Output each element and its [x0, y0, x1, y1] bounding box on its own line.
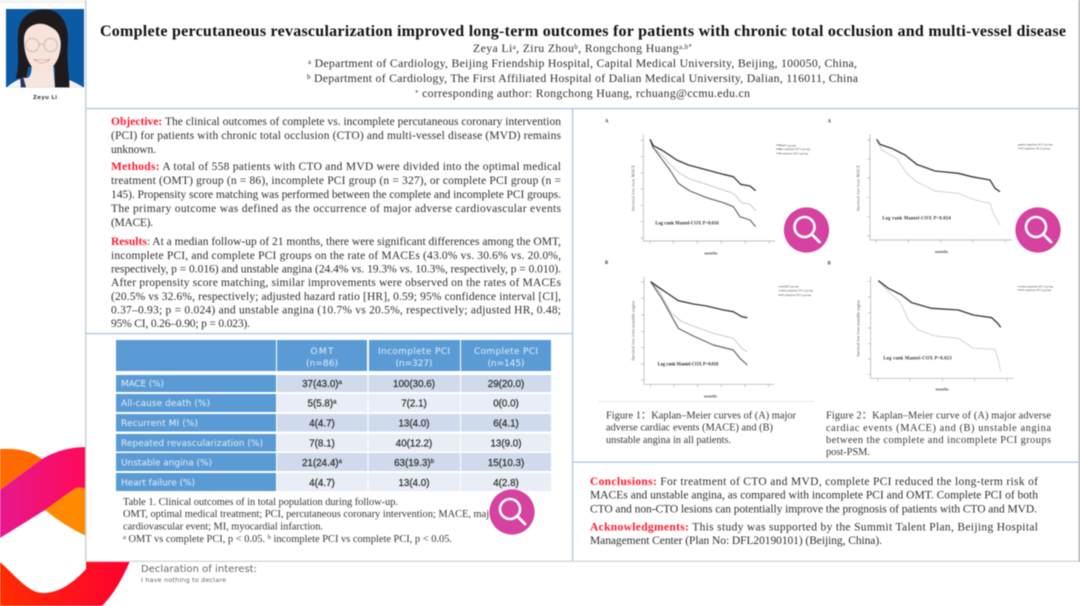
authors and affiliations: * — [415, 89, 419, 97]
acknowledgments text: Management Center (Plan No: DFL20190101) (Beijing, China). — [590, 535, 882, 547]
chart B: KM curves all patients unstable angina — [605, 261, 814, 398]
conclusions text: CTO and non-CTO lesions can potentially improve the prognosis of patients with CTO and MVD. — [590, 504, 1037, 516]
chart A: KM curves post-PSM MACE: months — [935, 249, 949, 254]
row: heart failure: 4(4.7) — [309, 478, 335, 489]
methods text — [111, 161, 562, 229]
row: all-cause death: 7(2.1) — [401, 398, 427, 410]
figure 1 caption: adverse cardiac events (MACE) and (B) — [606, 422, 773, 434]
figure 2 caption: post-PSM. — [826, 447, 870, 458]
author photo — [6, 9, 84, 87]
table caption: cardiovascular event; MI, myocardial infarction. — [123, 522, 323, 532]
authors and affiliations: a,b* — [679, 43, 692, 51]
chart A: KM curves all patients MACE: months — [704, 251, 718, 256]
chart B: KM curves post-PSM unstable angina: months — [936, 387, 949, 392]
title: Complete percutaneous revascularization improved long-term outcomes for patients with chronic total occlusion and multi-vessel disease — [100, 23, 1066, 40]
results text: incomplete PCI, and complete PCI groups on the rate of MACEs (43.0% vs. 30.6% vs. 20.0%, — [111, 250, 561, 262]
authors and affiliations: Department of Cardiology, Beijing Friendship Hospital, Capital Medical University, Beijing, 100050, China, — [311, 56, 857, 70]
table caption: b — [268, 534, 271, 541]
chart A: KM curves all patients MACE — [605, 119, 811, 256]
row: recurrent MI: Recurrent MI (%) — [121, 419, 198, 429]
clinical outcomes table: (n=327) — [396, 359, 432, 369]
row: unstable angina: 63(19.3) — [394, 458, 431, 469]
row: unstable angina — [116, 453, 551, 471]
chart A: KM curves all patients MACE: Complete PCI group — [779, 151, 808, 155]
row: heart failure — [116, 473, 551, 491]
figure 2 caption: cardiac events (MACE) and (B) unstable angina — [826, 423, 1051, 434]
clinical outcomes table: (n=145) — [488, 359, 524, 369]
clinical outcomes table — [116, 340, 551, 491]
conclusions text: MACEs and unstable angina, as compared with incomplete PCI and OMT. Complete PCI of both — [590, 490, 1038, 502]
objective text: Objective: The clinical outcomes of complete vs. incomplete percutaneous coronary intervention — [111, 116, 561, 128]
authors and affiliations: b — [307, 73, 311, 81]
row: recurrent MI: 13(4.0) — [398, 418, 430, 430]
row: repeated revascularization — [116, 434, 551, 452]
row: recurrent MI: 4(4.7) — [309, 418, 335, 430]
table caption: a — [123, 534, 126, 541]
chart A: KM curves post-PSM MACE — [828, 119, 1053, 254]
row: unstable angina: 15(10.3) — [488, 458, 524, 469]
results text: 0.37–0.93; p = 0.024) and unstable angina (10.7% vs 20.5%, respectively; adjusted HR, 0.48; — [111, 304, 561, 316]
clinical outcomes table: OMT — [310, 347, 334, 357]
chart B: KM curves all patients unstable angina: Incomplete PCI group — [782, 289, 814, 293]
row: all-cause death — [116, 394, 551, 412]
objective text: (PCI) for patients with chronic total occlusion (CTO) and multi-vessel disease (MVD) remains — [111, 130, 562, 142]
row: unstable angina: a — [339, 459, 343, 465]
results text: After propensity score matching, similar improvements were observed on the rates of MACEs — [111, 277, 562, 289]
logo ribbon — [0, 447, 130, 606]
row: repeated revascularization: 13(9.0) — [490, 438, 522, 450]
chart B: KM curves all patients unstable angina: Survival free from unstable angina — [631, 301, 636, 361]
row: unstable angina: 21(24.4) — [302, 458, 339, 469]
row: all-cause death: 5(5.8) — [308, 398, 333, 410]
results text: 95% CI, 0.26–0.90; p = 0.023). — [111, 318, 250, 330]
clinical outcomes table: (n=86) — [306, 359, 338, 369]
authors and affiliations: a — [308, 58, 312, 66]
figure 1 caption — [598, 401, 814, 446]
results text — [111, 236, 562, 330]
row: MACE — [116, 375, 551, 392]
figure 2 caption — [826, 410, 1051, 458]
row: heart failure: 4(2.8) — [493, 478, 519, 489]
declaration of interest — [141, 564, 257, 584]
icon: magnifier on table — [489, 489, 535, 535]
figure 2 caption: Figure 2：Kaplan–Meier curve of (A) major adverse — [826, 410, 1051, 422]
chart B: KM curves all patients unstable angina: Complete PCI group — [782, 293, 811, 297]
acknowledgments text: Acknowledgments: This study was supported by the Summit Talent Plan, Beijing Hospital — [590, 522, 1038, 534]
figure 1 caption: Figure 1：Kaplan–Meier curves of (A) major — [606, 410, 797, 422]
row: MACE: 37(43.0) — [302, 379, 339, 390]
conclusions text: Conclusions: For treatment of CTO and MVD, complete PCI reduced the long-term risk of — [590, 476, 1038, 488]
chart A: KM curves all patients MACE: A — [605, 119, 609, 124]
chart B: KM curves post-PSM unstable angina: Complete PCI group — [1022, 288, 1051, 292]
chart A: KM curves all patients MACE: OMT group — [779, 143, 796, 147]
clinical outcomes table: Complete PCI — [474, 347, 538, 357]
row: unstable angina: b — [431, 459, 435, 465]
chart A: KM curves post-PSM MACE: Incomplete PCI group — [1022, 143, 1053, 147]
authors and affiliations: b — [574, 43, 578, 51]
chart A: KM curves post-PSM MACE: Log rank Mantel-COX P=0.024 — [882, 216, 951, 221]
chart B: KM curves post-PSM unstable angina: B — [828, 261, 831, 266]
chart A: KM curves post-PSM MACE: A — [828, 119, 832, 124]
row: MACE: MACE (%) — [121, 380, 164, 390]
methods text: (MACE). — [111, 217, 153, 229]
clinical outcomes table: Incomplete PCI — [378, 347, 450, 357]
figure 2 caption: between the complete and incomplete PCI groups — [826, 435, 1051, 446]
chart B: KM curves post-PSM unstable angina: Log rank Mantel-COX P=0.023 — [883, 357, 952, 362]
author name: Zeyu Li — [33, 95, 57, 101]
chart B: KM curves all patients unstable angina: Log rank Mantel-COX P=0.010 — [658, 363, 719, 368]
row: repeated revascularization: 40(12.2) — [396, 438, 432, 450]
row: recurrent MI — [116, 414, 551, 432]
row: all-cause death: a — [333, 400, 337, 406]
authors and affiliations: , Rongchong Huang — [578, 41, 679, 55]
row: MACE: 100(30.6) — [393, 379, 435, 390]
chart A: KM curves post-PSM MACE: Survival free from MACE — [856, 165, 861, 211]
chart B: KM curves all patients unstable angina: B — [605, 261, 608, 266]
icon: magnifier on chart A post-PSM — [1015, 207, 1061, 253]
methods text: The primary outcome was defined as the occurrence of major adverse cardiovascular events — [111, 203, 562, 215]
row: unstable angina: Unstable angina (%) — [121, 458, 212, 468]
row: heart failure: 13(4.0) — [398, 478, 430, 489]
chart B: KM curves all patients unstable angina: months — [704, 393, 718, 398]
row: heart failure: Heart failure (%) — [121, 478, 195, 488]
table caption: OMT, optimal medical treatment; PCI, percutaneous coronary intervention; MACE, major adverse — [123, 509, 532, 520]
authors and affiliations: Zeya Li — [473, 41, 512, 55]
chart A: KM curves all patients MACE: Incomplete PCI group — [779, 147, 811, 151]
row: MACE: a — [339, 380, 343, 386]
results text: (20.5% vs 32.6%, respectively; adjusted hazard ratio [HR], 0.59; 95% confidence interval [CI], — [111, 291, 561, 303]
objective text: unknown. — [111, 144, 156, 156]
row: repeated revascularization: Repeated revascularization (%) — [121, 439, 263, 449]
row: recurrent MI: 6(4.1) — [493, 418, 519, 430]
authors and affiliations: corresponding author: Rongchong Huang, rchuang@ccmu.edu.cn — [419, 86, 750, 100]
table caption: incomplete PCI vs complete PCI, p < 0.05. — [271, 534, 452, 545]
table caption: OMT vs complete PCI, p < 0.05. — [126, 534, 268, 545]
methods text: Methods: A total of 558 patients with CTO and MVD were divided into the optimal medical — [111, 161, 561, 173]
table caption: Table 1. Clinical outcomes of in total population during follow-up. — [123, 497, 398, 508]
authors and affiliations — [307, 41, 859, 100]
results text: respectively, p = 0.016) and unstable angina (24.4% vs. 19.3% vs. 10.3%, respectively, p = 0.010). — [111, 264, 561, 276]
authors and affiliations: , Ziru Zhou — [516, 41, 574, 55]
declaration of interest: I have nothing to declare — [141, 576, 226, 584]
row: MACE: 29(20.0) — [488, 379, 524, 390]
methods text: 145). Propensity score matching was performed between the complete and incomplete PCI groups. — [111, 189, 561, 201]
authors and affiliations: a — [513, 43, 517, 51]
chart A: KM curves all patients MACE: Survival free from MACE — [631, 165, 636, 211]
chart B: KM curves post-PSM unstable angina — [828, 261, 1054, 392]
icon: magnifier on chart A — [784, 207, 829, 253]
table caption — [123, 497, 532, 545]
chart A: KM curves post-PSM MACE: Complete PCI group — [1022, 146, 1051, 150]
row: all-cause death: 0(0.0) — [493, 398, 519, 410]
chart B: KM curves post-PSM unstable angina: Incomplete PCI group — [1022, 284, 1054, 288]
row: all-cause death: All-cause death (%) — [121, 399, 210, 409]
methods text: treatment (OMT) group (n = 86), incomplete PCI group (n = 327), or complete PCI group (n = — [111, 175, 561, 187]
objective text — [111, 116, 562, 156]
results text: Results: At a median follow-up of 21 months, there were significant differences among the OMT, — [111, 236, 561, 248]
declaration of interest: Declaration of interest: — [141, 564, 257, 575]
chart B: KM curves post-PSM unstable angina: Survival free from unstable angina — [856, 300, 861, 357]
row: repeated revascularization: 7(8.1) — [309, 438, 335, 450]
chart A: KM curves all patients MACE: Log rank Mantel-COX P=0.016 — [655, 222, 719, 227]
conclusions text — [590, 476, 1038, 516]
acknowledgments text — [590, 522, 1038, 547]
figure 1 caption: unstable angina in all patients. — [606, 435, 731, 446]
authors and affiliations: Department of Cardiology, The First Affiliated Hospital of Dalian Medical University, Dalian, 116011, China — [311, 71, 859, 85]
chart B: KM curves all patients unstable angina: OMT group — [782, 285, 799, 289]
